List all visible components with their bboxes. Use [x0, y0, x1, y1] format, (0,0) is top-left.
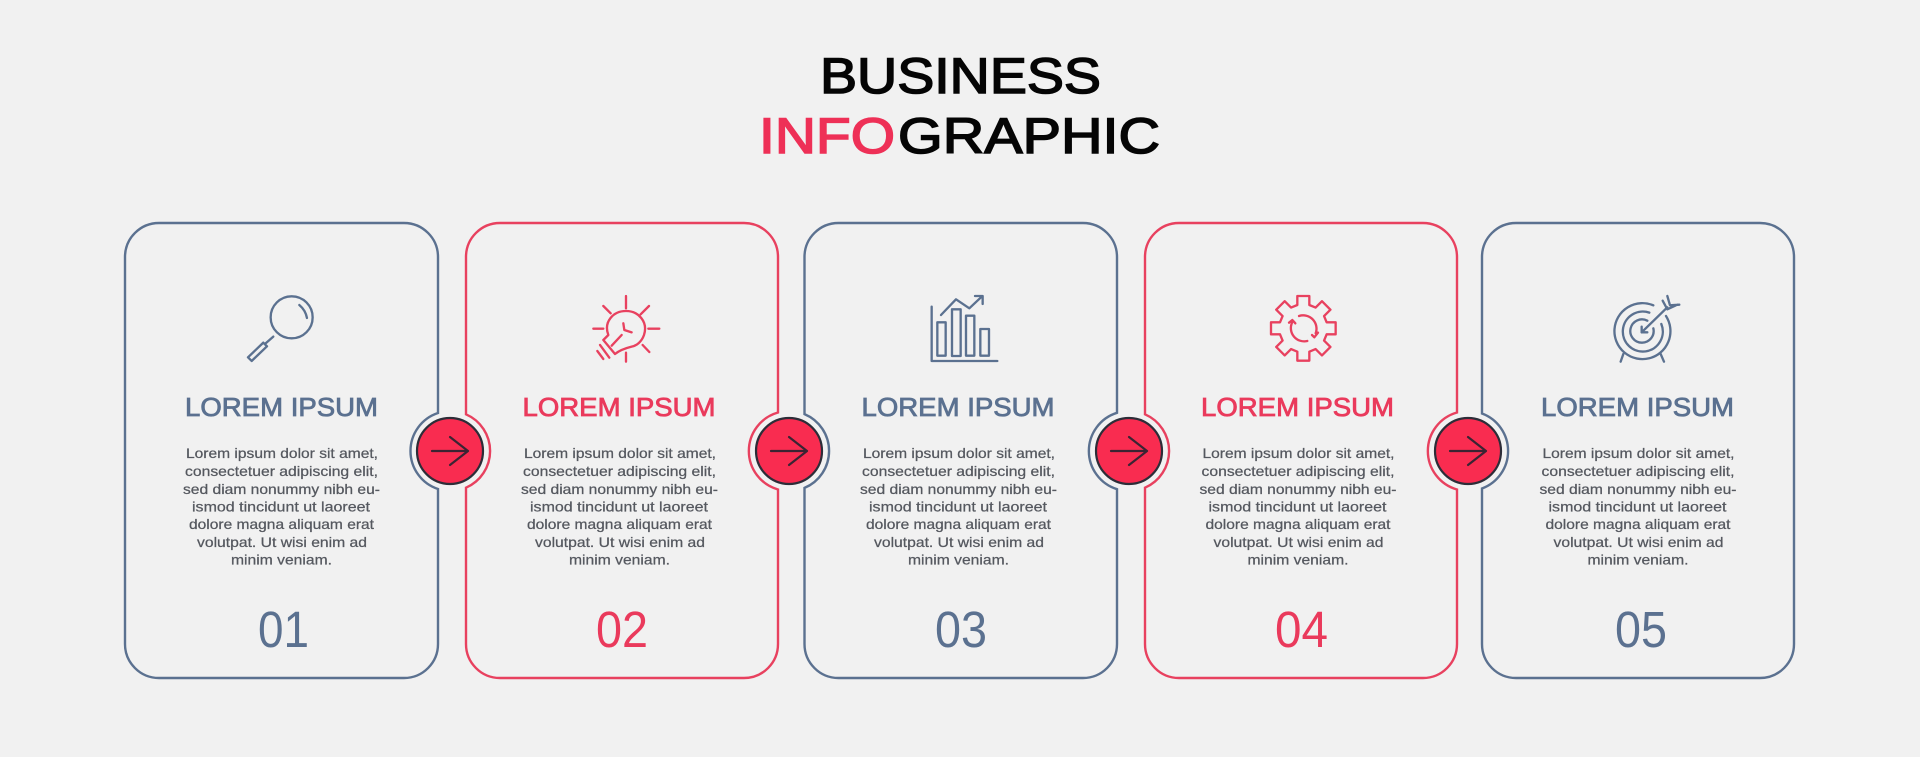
title: GRAPHIC: [898, 108, 1160, 164]
text block 01: dolore magna aliquam erat: [189, 516, 374, 532]
text block 01: Lorem ipsum dolor sit amet,: [186, 445, 378, 461]
number 04: 04: [1275, 601, 1328, 658]
text block 03: volutpat. Ut wisi enim ad: [874, 534, 1044, 550]
title: INFO: [759, 108, 895, 164]
panel: step 02: [466, 223, 778, 678]
text block 05: minim veniam.: [1588, 552, 1688, 568]
text block 05: volutpat. Ut wisi enim ad: [1554, 534, 1724, 550]
text block 03: Lorem ipsum dolor sit amet,: [863, 445, 1055, 461]
text block 02: ismod tincidunt ut laoreet: [530, 498, 708, 514]
title: BUSINESS: [820, 48, 1101, 104]
text block 02: sed diam nonummy nibh eu-: [521, 481, 718, 497]
text block 05: dolore magna aliquam erat: [1546, 516, 1731, 532]
icon: gear with cycle arrows: [1271, 296, 1336, 361]
text block 03: minim veniam.: [908, 552, 1009, 568]
heading 05: LOREM IPSUM: [1541, 392, 1734, 422]
arrow badge 1: [417, 418, 483, 484]
text block 03: sed diam nonummy nibh eu-: [860, 481, 1057, 497]
icon: magnifying glass: [248, 296, 313, 361]
icon: bar chart with arrow: [932, 296, 997, 361]
arrow badge 2: [756, 418, 822, 484]
text block 04: Lorem ipsum dolor sit amet,: [1202, 445, 1394, 461]
arrow badge 4: [1435, 418, 1501, 484]
text block 05: Lorem ipsum dolor sit amet,: [1542, 445, 1734, 461]
text block 02: [521, 445, 718, 568]
text block 01: consectetuer adipiscing elit,: [185, 463, 378, 479]
heading 03: LOREM IPSUM: [862, 392, 1054, 422]
text block 02: dolore magna aliquam erat: [527, 516, 712, 532]
number 05: 05: [1615, 601, 1667, 658]
number 02: 02: [596, 601, 648, 658]
card outline 01: [125, 223, 438, 678]
text block 01: volutpat. Ut wisi enim ad: [197, 534, 367, 550]
text block 02: consectetuer adipiscing elit,: [523, 463, 716, 479]
heading 01: LOREM IPSUM: [185, 392, 378, 422]
text block 01: minim veniam.: [231, 552, 332, 568]
text block 03: consectetuer adipiscing elit,: [862, 463, 1055, 479]
title: [759, 48, 1160, 164]
heading 04: LOREM IPSUM: [1201, 392, 1394, 422]
number 03: 03: [935, 601, 987, 658]
text block 03: [860, 445, 1057, 568]
text block 04: minim veniam.: [1248, 552, 1348, 568]
panel: step 05: [1482, 223, 1794, 678]
text block 05: consectetuer adipiscing elit,: [1542, 463, 1734, 479]
text block 03: ismod tincidunt ut laoreet: [869, 498, 1047, 514]
text block 04: dolore magna aliquam erat: [1206, 516, 1391, 532]
text block 01: [183, 445, 380, 568]
card outline 03: [804, 223, 1117, 678]
card outline 05: [1482, 223, 1794, 678]
text block 04: sed diam nonummy nibh eu-: [1200, 481, 1397, 497]
card outline 02: [466, 223, 778, 678]
text block 05: [1540, 445, 1737, 568]
icon: light bulb with clock: [593, 296, 659, 362]
text block 01: sed diam nonummy nibh eu-: [183, 481, 380, 497]
panel: step 03: [804, 223, 1117, 678]
text block 05: sed diam nonummy nibh eu-: [1540, 481, 1737, 497]
arrow badge 3: [1096, 418, 1162, 484]
panel: step 01: [125, 223, 438, 678]
card outline 04: [1145, 223, 1457, 678]
text block 04: ismod tincidunt ut laoreet: [1208, 498, 1387, 514]
panel: step 04: [1145, 223, 1457, 678]
text block 04: [1200, 445, 1397, 568]
heading 02: LOREM IPSUM: [522, 392, 716, 422]
text block 05: ismod tincidunt ut laoreet: [1548, 498, 1727, 514]
text block 04: consectetuer adipiscing elit,: [1202, 463, 1394, 479]
text block 01: ismod tincidunt ut laoreet: [192, 498, 370, 514]
text block 02: volutpat. Ut wisi enim ad: [535, 534, 705, 550]
text block 03: dolore magna aliquam erat: [866, 516, 1051, 532]
icon: target with arrow: [1614, 296, 1679, 362]
text block 02: minim veniam.: [569, 552, 670, 568]
number 01: 01: [258, 601, 309, 658]
text block 04: volutpat. Ut wisi enim ad: [1214, 534, 1384, 550]
text block 02: Lorem ipsum dolor sit amet,: [524, 445, 716, 461]
